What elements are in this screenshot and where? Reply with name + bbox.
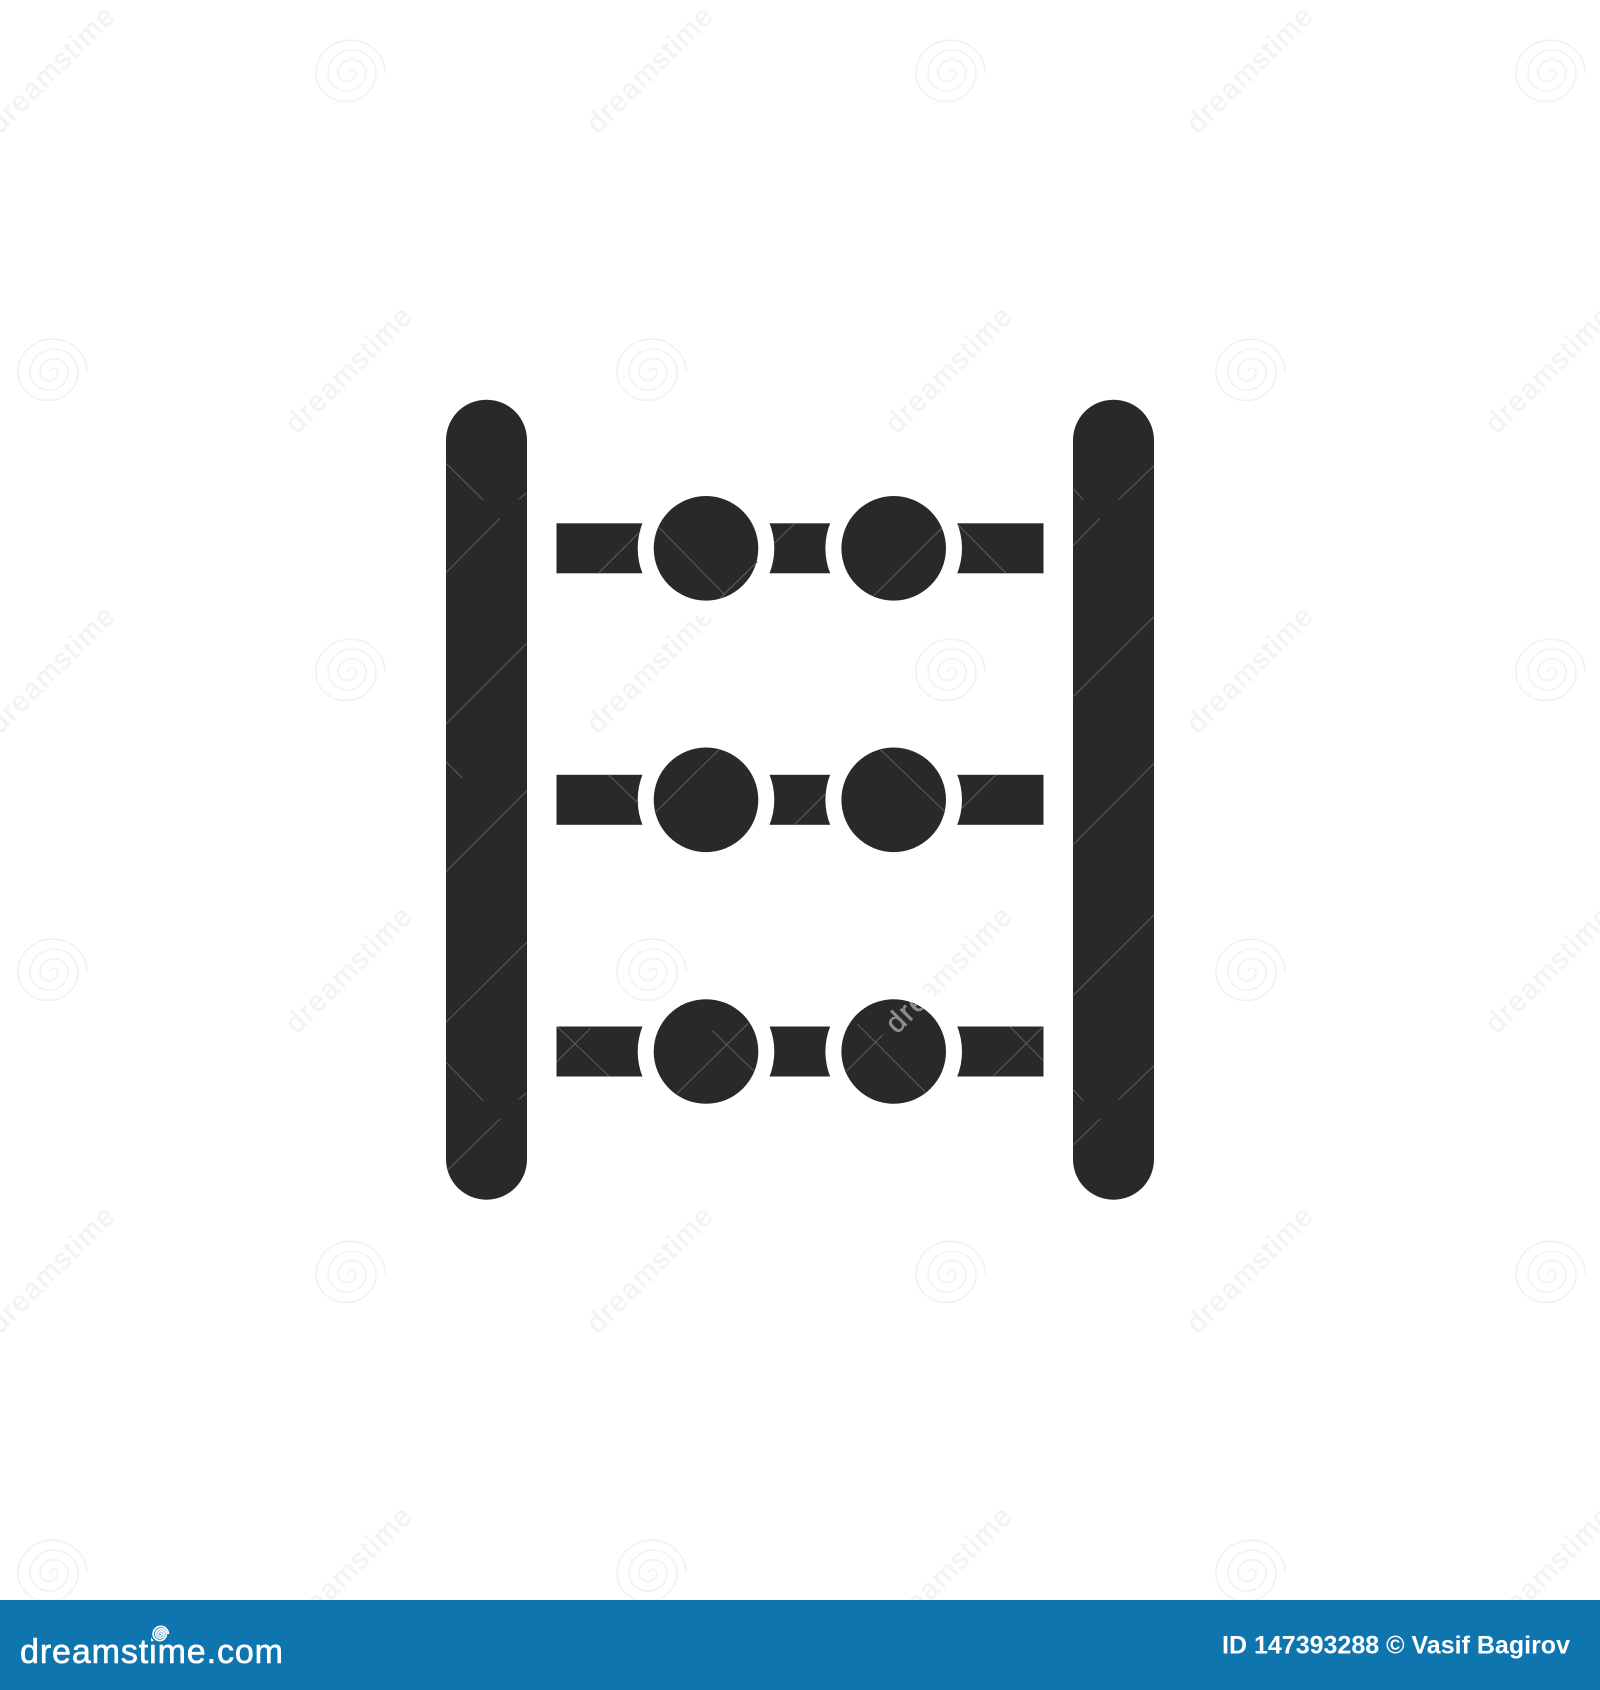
watermark text: dreamstime <box>879 300 1019 440</box>
watermark lines over the icon <box>446 463 1154 1169</box>
icon: abacus <box>446 400 1154 1200</box>
image id and credit: ID 147393288 © Vasif Bagirov <box>1222 1632 1570 1660</box>
abacus row 1 <box>556 480 1044 617</box>
watermark text: dreamstime <box>279 900 419 1040</box>
icon: logo spiral <box>151 1624 171 1644</box>
watermark text: dreamstime <box>1180 600 1320 740</box>
watermark text over bead: dreamstime <box>879 900 1019 1040</box>
watermark text: dreamstime <box>879 1500 1019 1640</box>
watermark text: dreamstime <box>1180 0 1320 140</box>
watermark text: dreamstime <box>879 900 1019 1040</box>
watermark text: dreamstime <box>580 1200 720 1340</box>
footer banner <box>0 1600 1600 1690</box>
watermark text: dreamstime <box>580 0 720 140</box>
abacus row 2 <box>556 732 1044 868</box>
dreamstime logo text: dreamstime.com <box>20 1633 283 1671</box>
watermark text: dreamstime <box>279 1500 419 1640</box>
abacus right frame bar <box>1073 400 1154 1200</box>
watermark text: dreamstime <box>580 600 720 740</box>
abacus left frame bar <box>446 400 527 1200</box>
abacus row 3 <box>556 983 1044 1120</box>
watermark text: dreamstime <box>1180 1200 1320 1340</box>
watermark text: dreamstime <box>279 300 419 440</box>
